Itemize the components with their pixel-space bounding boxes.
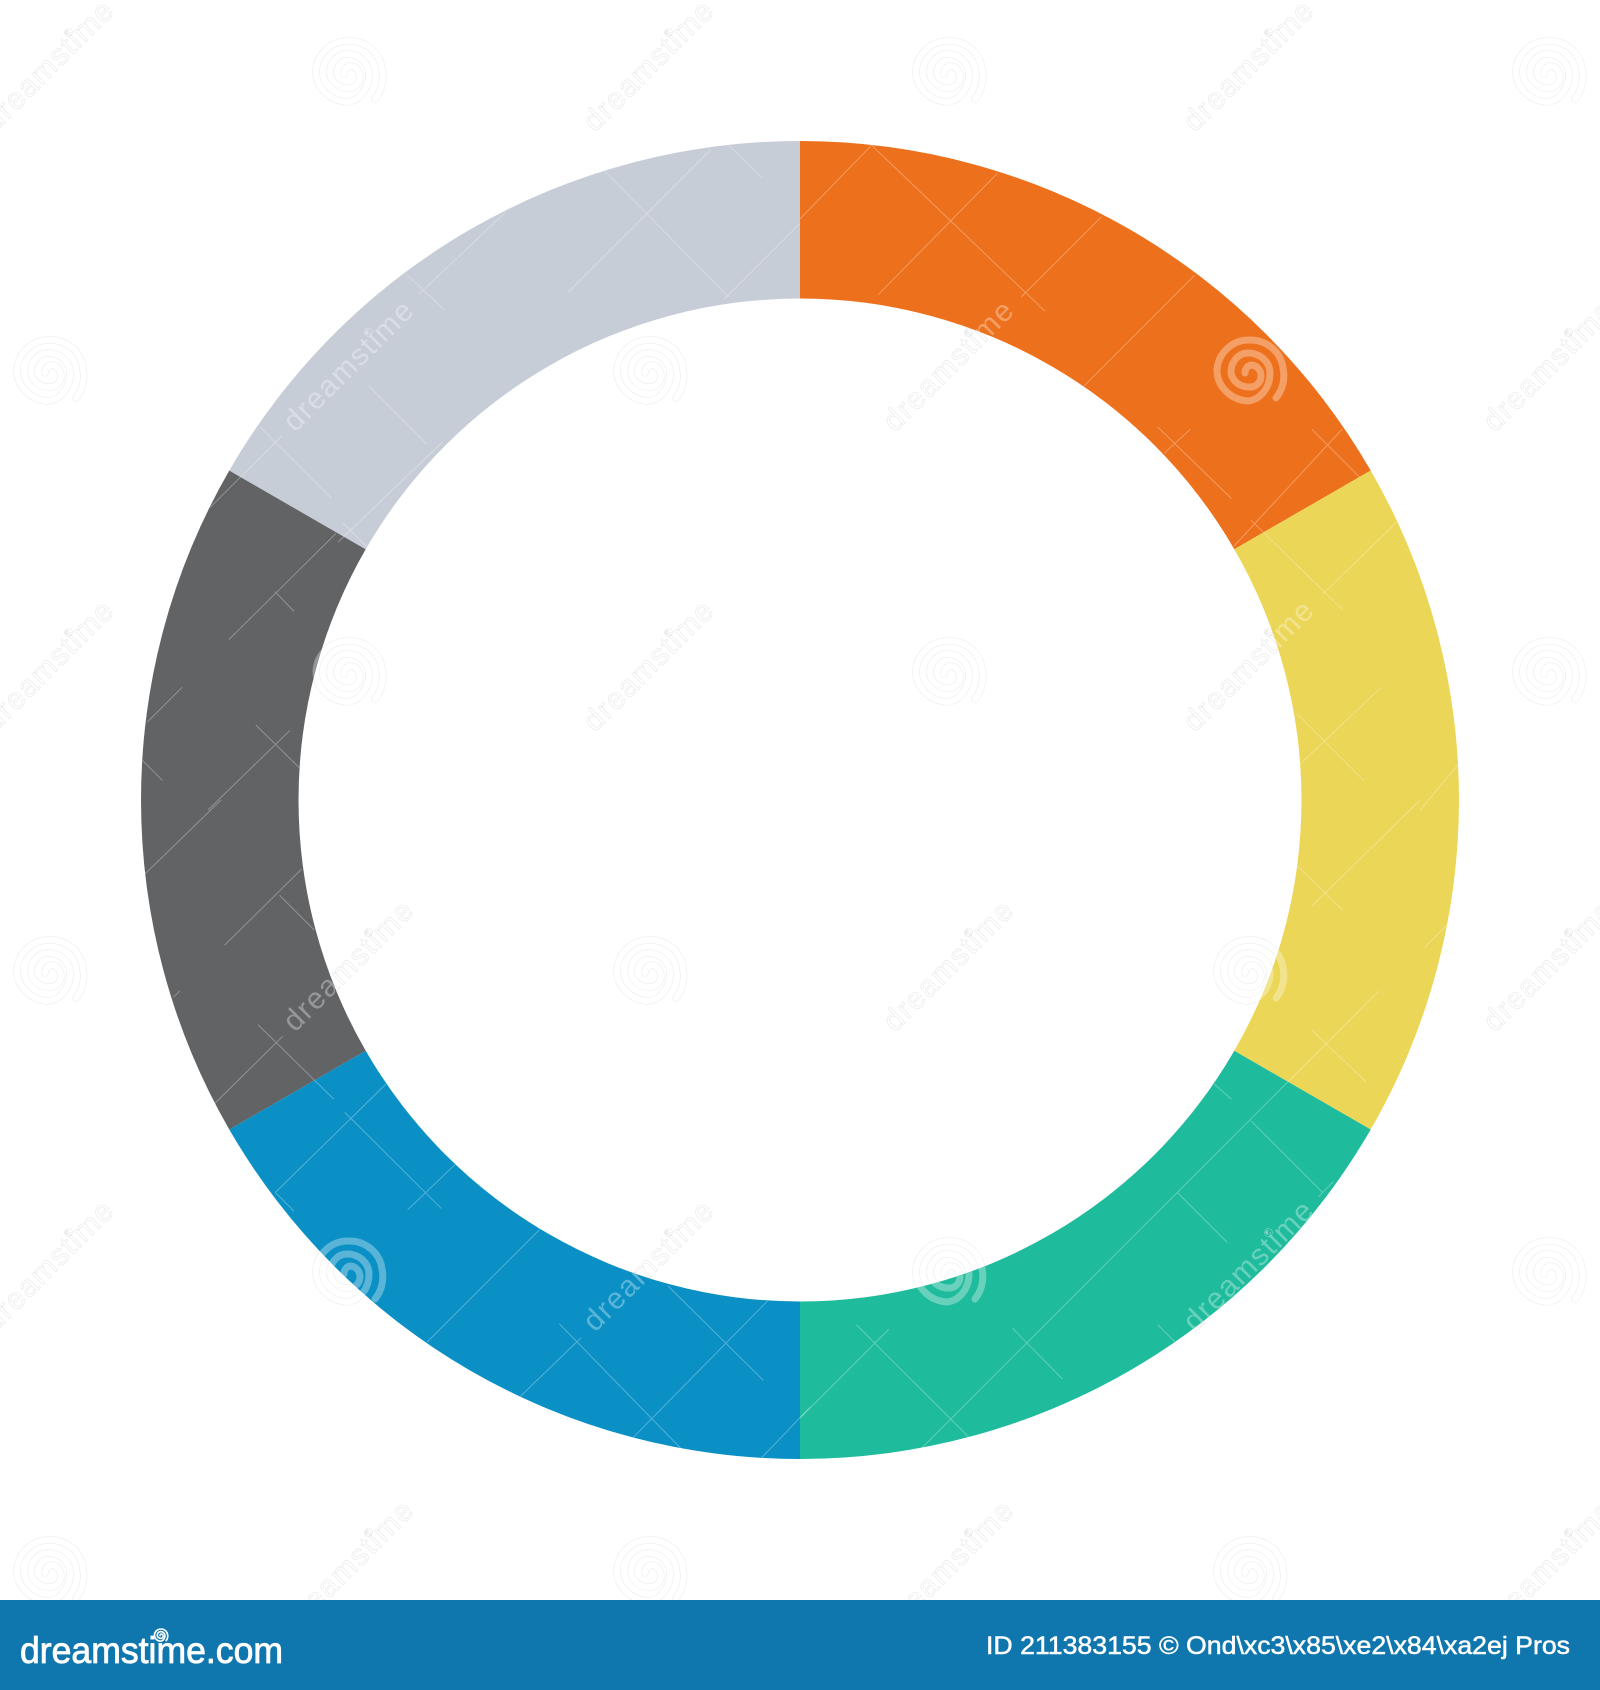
watermark text on white background: dreamstime	[577, 594, 720, 738]
segment: orange	[800, 141, 1371, 549]
watermark copyright marks on white background: ©	[60, 624, 77, 641]
segment: dark grey	[141, 470, 366, 1130]
watermark copyright marks on white background: ©	[1560, 1524, 1577, 1541]
watermark copyright marks on white background: ©	[960, 324, 977, 341]
footer banner	[0, 1600, 1600, 1690]
watermark copyright marks on white background: ©	[660, 1224, 677, 1241]
watermark text on white background: dreamstime	[877, 894, 1020, 1038]
watermark copyright marks on white background: ©	[360, 924, 377, 941]
watermark copyright marks on white background: ©	[360, 1524, 377, 1541]
watermark text on white background: dreamstime	[277, 1494, 420, 1638]
logo spiral icon	[154, 1629, 168, 1641]
watermark text on white background: dreamstime	[1177, 1194, 1320, 1338]
watermark copyright marks on white background: ©	[1560, 924, 1577, 941]
watermark text on white background: dreamstime	[277, 294, 420, 438]
watermark copyright marks over ring: ©	[360, 324, 377, 341]
watermark copyright marks on white background: ©	[660, 24, 677, 41]
watermark text over ring: dreamstime	[877, 294, 1020, 438]
watermark spirals over ring	[316, 340, 1284, 1302]
watermark text over ring: dreamstime	[1177, 1194, 1320, 1338]
watermark text on white background: dreamstime	[1177, 594, 1320, 738]
watermark copyright marks on white background: ©	[1260, 24, 1277, 41]
watermark copyright marks on white background: ©	[1260, 624, 1277, 641]
watermark text over ring: dreamstime	[1177, 594, 1320, 738]
image id credit: ID 211383155 © Ond\xc3\x85\xe2\x84\xa2ej Pros	[986, 1632, 1570, 1660]
watermark copyright marks over ring: ©	[1260, 1224, 1277, 1241]
watermark hairlines over ring	[141, 145, 1459, 1458]
watermark copyright marks on white background: ©	[1560, 324, 1577, 341]
segment: light grey	[229, 141, 800, 549]
watermark text over ring: dreamstime	[277, 294, 420, 438]
watermark text on white background: dreamstime	[877, 294, 1020, 438]
logo text: dreamstime.com	[20, 1630, 283, 1671]
watermark copyright marks on white background: ©	[960, 1524, 977, 1541]
watermark text over ring: dreamstime	[577, 1194, 720, 1338]
segment: yellow	[1234, 470, 1459, 1130]
watermark copyright marks on white background: ©	[60, 24, 77, 41]
watermark copyright marks on white background: ©	[1260, 1224, 1277, 1241]
watermark copyright marks on white background: ©	[360, 324, 377, 341]
donut ring chart	[141, 141, 1459, 1459]
watermark text on white background: dreamstime	[877, 1494, 1020, 1638]
segment: green	[800, 1051, 1371, 1459]
watermark copyright marks over ring	[360, 324, 1277, 1241]
watermark copyright marks on white background: ©	[960, 924, 977, 941]
segment: blue	[229, 1051, 800, 1459]
watermark text on white background: dreamstime	[577, 1194, 720, 1338]
watermark text over ring	[277, 294, 1320, 1338]
watermark copyright marks on white background: ©	[660, 624, 677, 641]
watermark text over ring: dreamstime	[277, 894, 420, 1038]
watermark copyright marks on white background: ©	[60, 1224, 77, 1241]
watermark text on white background: dreamstime	[277, 894, 420, 1038]
